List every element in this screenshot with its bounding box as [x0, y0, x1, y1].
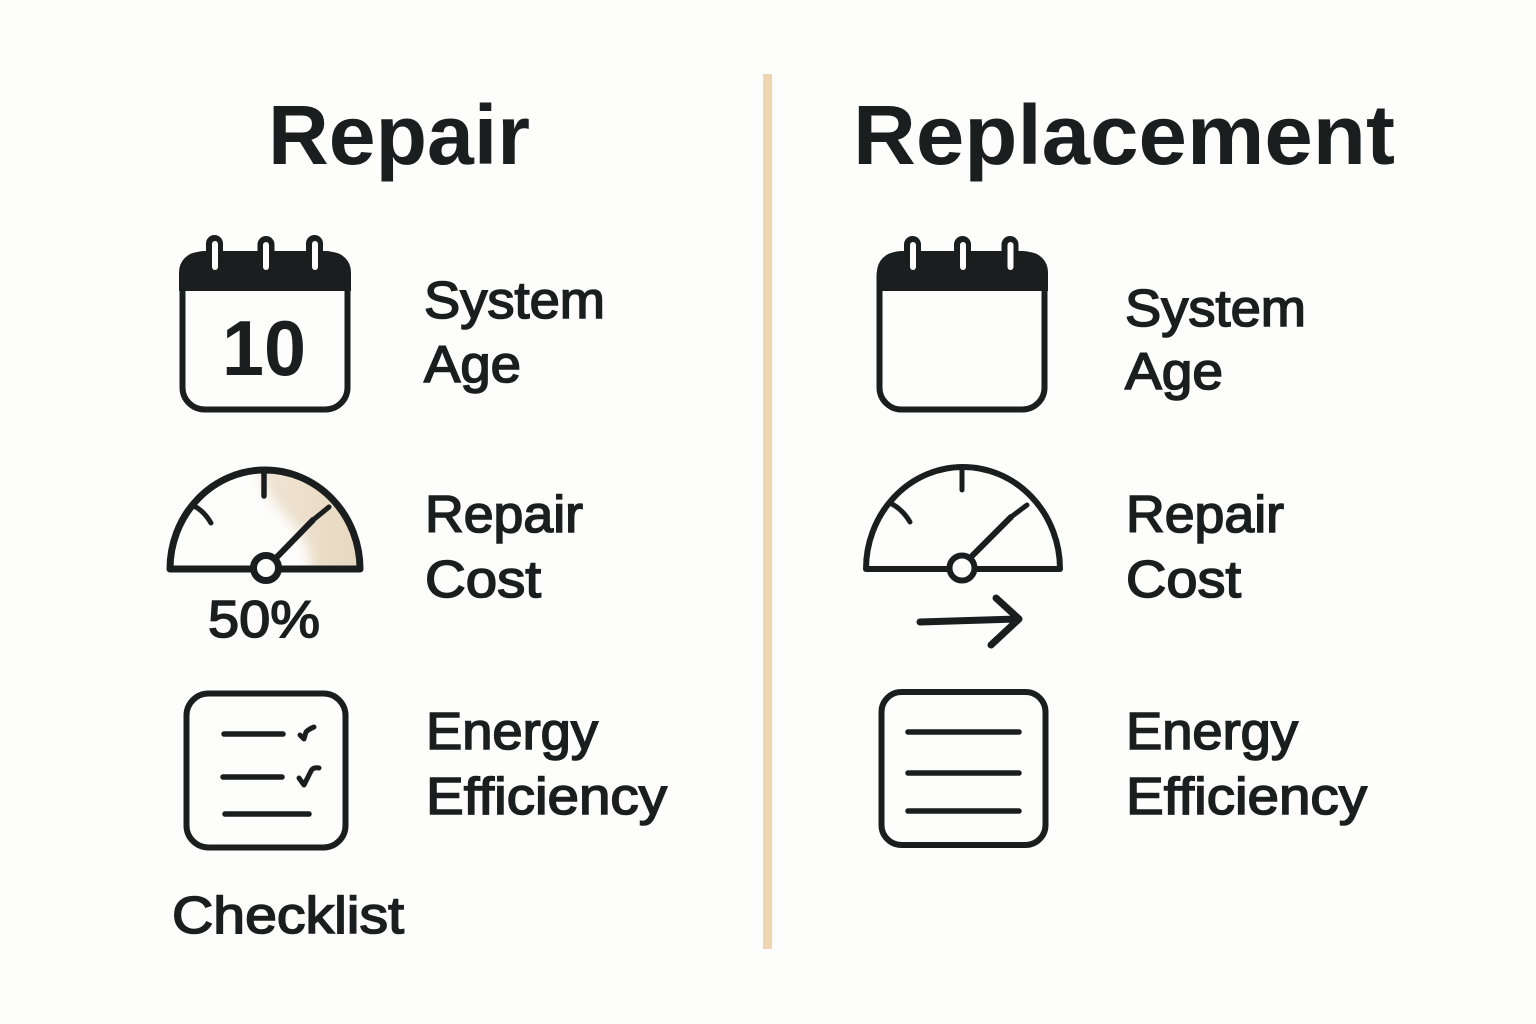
label: Energy Efficiency: Efficiency: [426, 768, 667, 826]
heading: Replacement: Replacement: [853, 88, 1395, 182]
icon: document lines: [882, 692, 1046, 845]
icon: gauge at 50%: [170, 460, 370, 580]
icon: gauge: [866, 467, 1060, 580]
divider: [763, 74, 772, 949]
icon: calendar showing 10: [179, 235, 351, 410]
label: System Age: Age: [1125, 343, 1223, 401]
label: Repair Cost: [425, 486, 583, 609]
label: System Age: [1125, 280, 1306, 401]
icon: empty calendar: [877, 236, 1048, 410]
panel: repair: [170, 88, 667, 945]
label: Repair Cost: Cost: [1126, 551, 1242, 609]
panel: replacement: [853, 88, 1395, 845]
icon: checklist: [186, 694, 346, 848]
text: 50%: 50%: [208, 591, 320, 649]
label: System Age: Age: [424, 336, 521, 394]
label: Energy Efficiency: Energy: [1126, 703, 1298, 761]
label: Repair Cost: Repair: [1126, 486, 1284, 544]
label: Energy Efficiency: [1126, 703, 1367, 826]
label: Checklist: Checklist: [172, 887, 405, 945]
label: System Age: System: [424, 272, 605, 330]
label: Repair Cost: Repair: [425, 486, 583, 544]
label: Repair Cost: Cost: [425, 551, 542, 609]
icon: calendar showing 10: 10: [222, 304, 306, 392]
label: Energy Efficiency: Efficiency: [1126, 768, 1367, 826]
label: Energy Efficiency: [426, 703, 667, 826]
heading: Repair: Repair: [268, 88, 530, 182]
label: Energy Efficiency: Energy: [426, 703, 598, 761]
label: Repair Cost: [1126, 486, 1284, 609]
label: System Age: System: [1125, 280, 1306, 338]
icon: arrow: [920, 598, 1019, 645]
label: System Age: [424, 272, 605, 394]
